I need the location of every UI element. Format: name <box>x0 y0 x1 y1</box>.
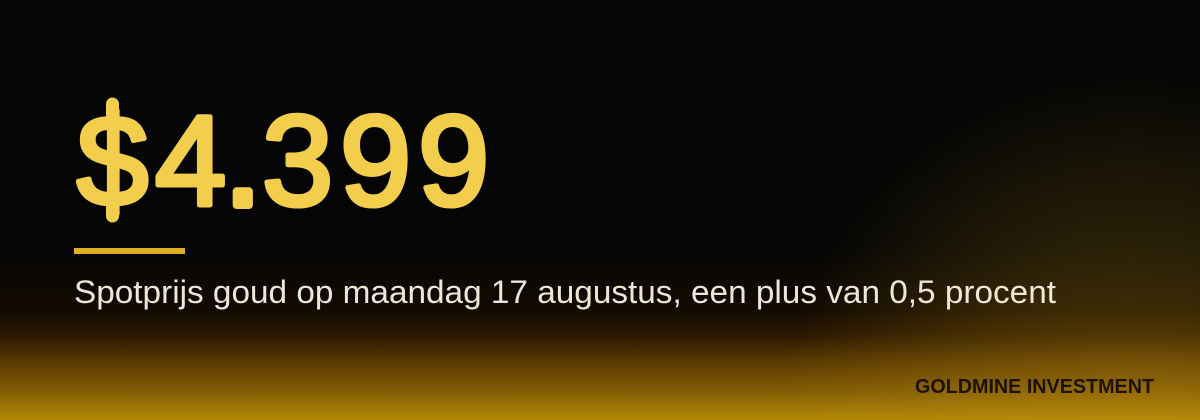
price figure: $4.399 <box>77 90 489 233</box>
accent rule <box>74 248 185 254</box>
brand label: GOLDMINE INVESTMENT <box>915 376 1154 398</box>
subtitle: Spotprijs goud op maandag 17 augustus, een plus van 0,5 procent <box>74 274 1056 310</box>
